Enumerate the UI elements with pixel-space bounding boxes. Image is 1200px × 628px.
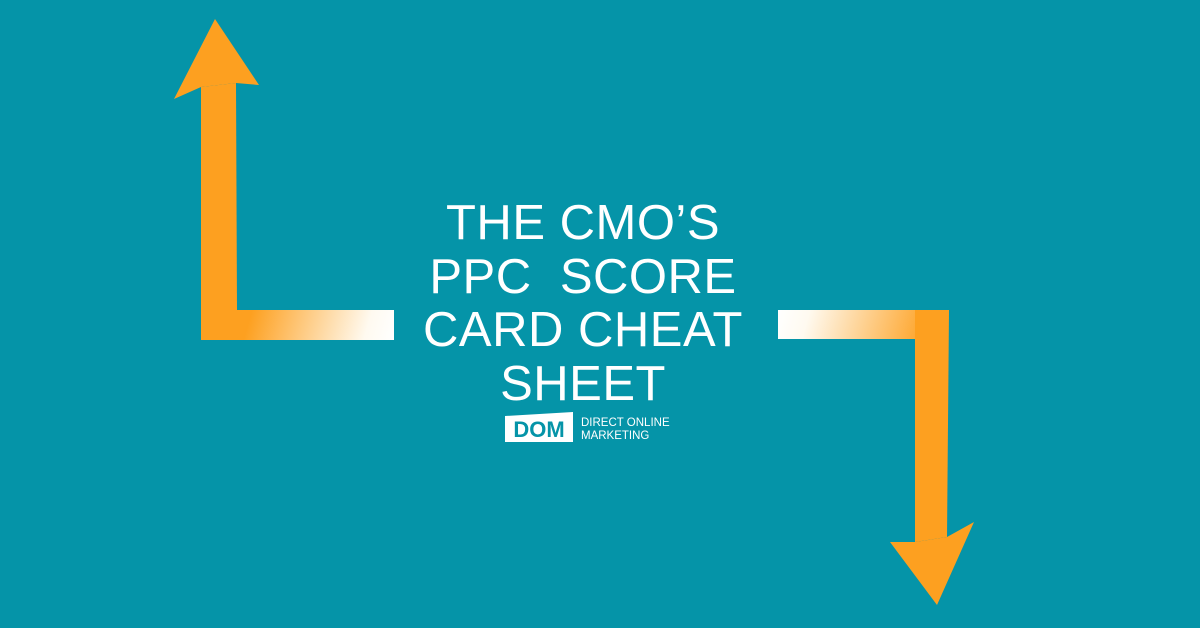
title: THE CMO’S <box>446 196 720 250</box>
logo: DOM Direct Online Marketing: DOM <box>513 417 565 442</box>
title: SHEET <box>500 356 666 410</box>
arrow: up-left <box>174 19 394 340</box>
logo: DOM Direct Online Marketing: DIRECT ONLINE <box>581 417 670 429</box>
arrow: down-right <box>778 310 974 605</box>
title: CARD CHEAT <box>423 303 743 357</box>
logo: DOM Direct Online Marketing: MARKETING <box>581 430 649 442</box>
title: PPC SCORE <box>429 250 737 304</box>
logo: DOM Direct Online Marketing <box>505 412 670 442</box>
title <box>423 196 743 410</box>
